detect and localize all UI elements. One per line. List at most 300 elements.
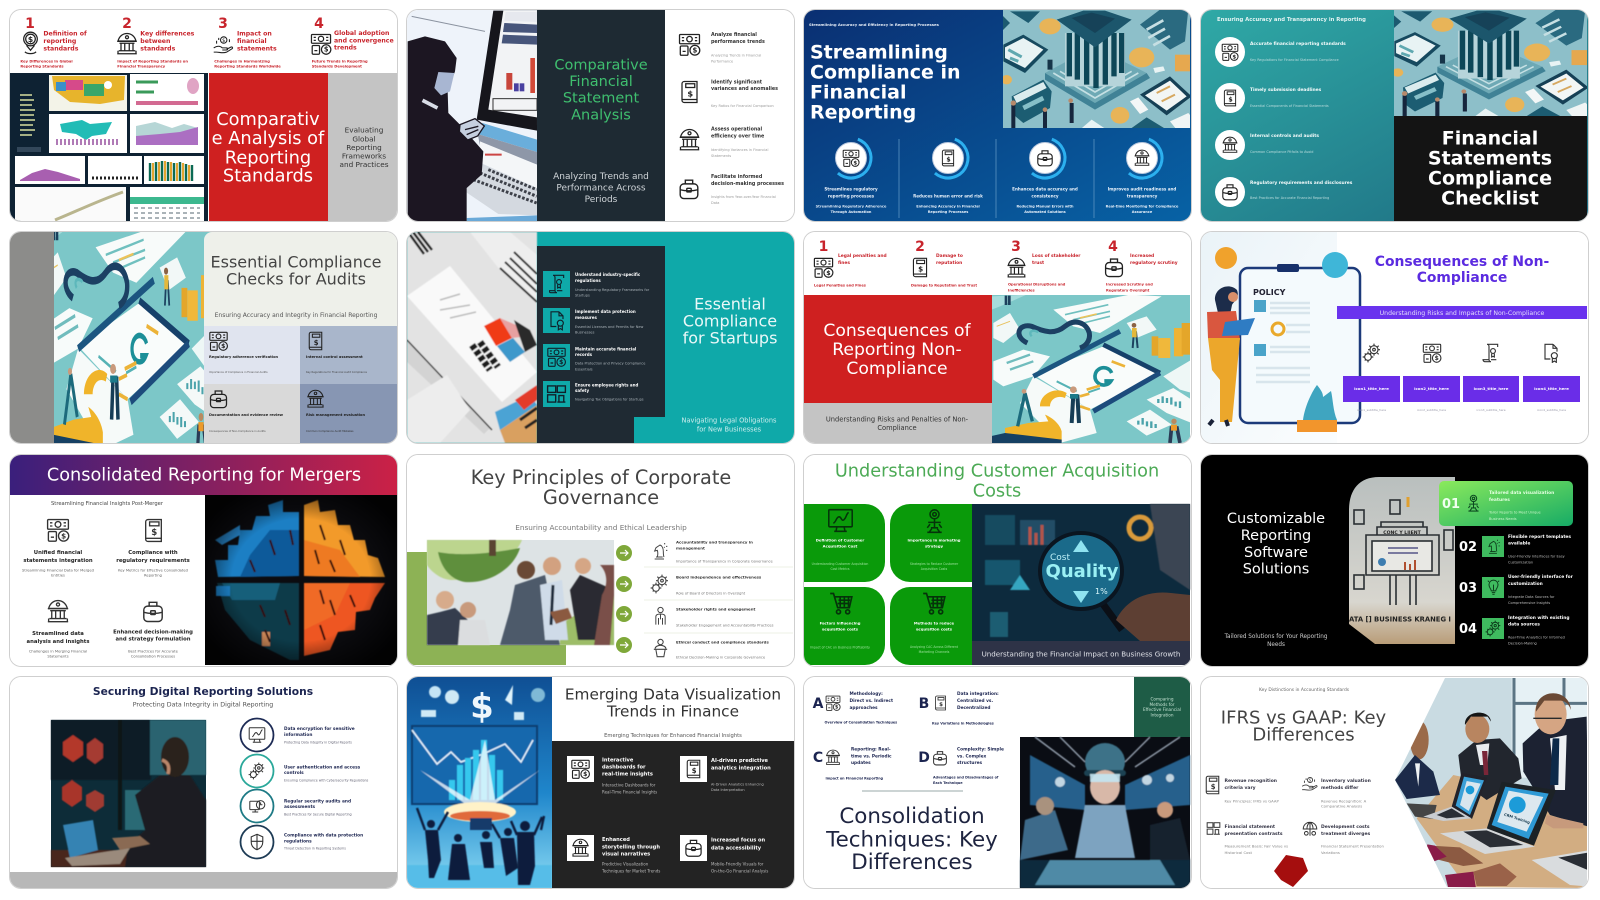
panel: Consolidation Techniques: Key Differences (804, 677, 1191, 888)
illustration: woman with policy clipboard (1201, 232, 1360, 443)
image: finance data burst (407, 677, 552, 888)
numbered item 4: trends (334, 44, 357, 51)
consequence 3: Operational Disruptions and (1008, 282, 1066, 286)
icon list: efficiency over time (711, 134, 765, 140)
difference 4: Variations (1321, 850, 1340, 855)
checklist item 3 (1215, 130, 1319, 160)
panel: Financial Statements Compliance Checklist (1201, 10, 1588, 221)
subtitle (1224, 634, 1328, 648)
benefit: unified statements: Unified financial (34, 550, 82, 556)
title: Reporting (1241, 528, 1311, 544)
card: importance: Strategies to Reduce Customer (910, 562, 959, 566)
icon list: Statements (711, 154, 731, 158)
icon list: Analyze financial (711, 32, 757, 38)
title: Trends in Finance (606, 702, 739, 720)
security item 4: Compliance with data protection (284, 832, 363, 838)
photo: magnifying glass on dashboard: Cost (1050, 553, 1070, 563)
title block (204, 232, 397, 326)
image: isometric documents (40, 224, 216, 453)
list item 3 (543, 344, 645, 372)
title: Governance (543, 486, 659, 509)
feature 01 highlighted: Tailored data visualization (1489, 490, 1554, 496)
benefit 4: Improves audit readiness and (1108, 186, 1176, 192)
checklist item 4: Regulatory requirements and disclosures (1250, 180, 1353, 186)
feature 03 (1459, 574, 1574, 605)
technique A: Overview of Consolidation Techniques (824, 720, 897, 724)
trend 2: AI-Driven Analytics Enhancing (711, 782, 764, 786)
panel: IFRS vs GAAP: Key Differences (1201, 677, 1588, 888)
numbered item 2: Impact of Reporting Standards on (117, 60, 188, 64)
list item 2: Essential Licenses and Permits for New (575, 325, 644, 329)
consequence 1: fines (838, 260, 850, 266)
arrow markers (616, 545, 632, 653)
consequence 4 (1106, 239, 1178, 292)
photo: business handshake (427, 540, 614, 645)
checklist item 3: Common Compliance Pitfalls to Avoid (1250, 150, 1313, 154)
difference 3: Financial statement (1224, 824, 1276, 830)
subtitle (553, 172, 649, 205)
icon list: Facilitate informed (711, 174, 763, 180)
title (683, 294, 777, 348)
photo: woman at monitor (405, 8, 537, 225)
technique B (919, 691, 999, 726)
card: importance: Importance in marketing (907, 538, 961, 542)
benefit 2: Reporting Processes (928, 210, 968, 214)
benefit 1: Through Automation (831, 210, 872, 214)
benefit 3 (1012, 132, 1078, 214)
list item 1: regulations (575, 278, 601, 283)
title: Financial (810, 82, 906, 104)
feature 04: 04 (1459, 622, 1477, 637)
check 2: Key Regulations for Financial Audit Compliance (306, 370, 367, 374)
numbered item 3: 3 (218, 16, 228, 32)
technique D: structures (957, 760, 982, 766)
card: factors: Impact of CAC on Business Profitability (810, 646, 870, 650)
photo: magnifying glass on dashboard: Quality (1046, 561, 1119, 582)
subtitle: for New Businesses (697, 426, 762, 434)
subtitle: Emerging Techniques for Enhanced Financial Insights (604, 733, 742, 739)
grey subtitle block (328, 73, 397, 221)
title: IFRS vs GAAP: Key (1221, 708, 1387, 728)
red title block (209, 73, 328, 221)
benefit: regulatory compliance: Compliance with (128, 550, 178, 556)
red title block: Compliance (846, 359, 948, 379)
difference 2 (1302, 777, 1371, 808)
impact 2: icon2_title_here (1414, 386, 1449, 391)
trend 3: Enhanced (602, 837, 630, 843)
numbered item 4: Standards Development (312, 64, 362, 68)
title: Compliance (1417, 270, 1507, 286)
banner: Understanding Risks and Impacts of Non-Compliance (1380, 310, 1545, 317)
numbered item 1: Key Differences in Global (20, 60, 73, 64)
eyebrow text: Streamlining Accuracy and Efficiency in Reporting Processes (809, 22, 940, 27)
difference 1: Key Principles: IFRS vs GAAP (1224, 798, 1279, 804)
grey subtitle block: Frameworks (342, 152, 386, 160)
list item 3: Maintain accurate financial (575, 346, 637, 352)
card: definition: Cost Metrics (830, 567, 850, 571)
benefit: regulatory compliance: regulatory requirements (116, 558, 190, 564)
feature 01 highlighted: features (1489, 497, 1510, 503)
title: Consequences of Non- (1375, 254, 1549, 270)
icon list: Identify significant (711, 80, 763, 86)
technique C: Impact on Financial Reporting (826, 776, 884, 780)
difference 2: methods differ (1321, 785, 1359, 791)
title: Costs (973, 482, 1021, 502)
card: factors: Factors influencing (820, 620, 861, 626)
title: Compliance in (810, 62, 961, 84)
numbered item 3: Reporting Standards Worldwide (214, 64, 281, 68)
grey subtitle block: Global (352, 134, 376, 144)
difference 4 (1303, 822, 1384, 855)
feature 01 highlighted: Tailor Reports to Meet Unique (1488, 510, 1541, 514)
security item 2: controls (284, 770, 304, 776)
technique A: Direct vs. Indirect (850, 698, 893, 704)
principle 4 (654, 639, 769, 660)
panel: Comparative Financial Statement Analysis (407, 10, 794, 221)
dashboard image (10, 73, 208, 221)
panel: Emerging Data Visualization Trends in Finance (407, 677, 794, 888)
trend 1: real-time insights (602, 772, 653, 778)
benefit: regulatory compliance (116, 520, 190, 578)
photo: magnifying glass on dashboard: 1% (1095, 587, 1108, 596)
title: Comparative (554, 58, 648, 74)
numbered item 3: statements (237, 46, 277, 53)
principle 2: Board independence and effectiveness (676, 574, 762, 580)
security item 4: regulations (284, 838, 312, 844)
list item 2: measures (575, 315, 597, 320)
technique C: time vs. Periodic (851, 754, 892, 760)
title (835, 462, 1159, 502)
technique C: updates (851, 760, 871, 766)
numbered item 1 (20, 16, 87, 68)
technique D: D (918, 750, 930, 766)
trend 2: Data Interpretation (711, 788, 745, 792)
title: Securing Digital Reporting Solutions (93, 685, 313, 698)
numbered item 2: 2 (122, 16, 132, 32)
list item 1: Understand industry-specific (575, 272, 641, 277)
consequence 4: 4 (1108, 239, 1118, 255)
red hexagon accent (1274, 855, 1308, 887)
black title block: Checklist (1441, 188, 1539, 210)
benefit: unified statements: statements integration (23, 558, 93, 564)
security item 3 (240, 790, 352, 822)
principle 3: Stakeholder Engagement and Accountability Practices (676, 624, 774, 628)
difference 1: criteria vary (1224, 785, 1256, 791)
benefit: decision making: Consolidation Processes (131, 654, 175, 658)
technique A: A (813, 696, 824, 712)
numbered item 4: Future Trends in Reporting (312, 60, 368, 64)
technique C (813, 746, 892, 780)
principle 1: Accountability and transparency in (676, 540, 753, 544)
benefit: regulatory compliance: Reporting (144, 574, 162, 578)
benefit 4: Assurance (1132, 210, 1153, 214)
eyebrow text: Ensuring Accuracy and Transparency in Reporting (1217, 17, 1366, 23)
checklist item 1: Key Regulations for Financial Statement Compliance (1250, 58, 1339, 62)
checklist item 1: Accurate financial reporting standards (1250, 41, 1346, 47)
numbered item 4: and convergence (334, 37, 394, 44)
numbered item 1: Reporting Standards (20, 64, 64, 68)
check 4: Common Compliance Audit Mistakes (306, 429, 354, 433)
consequence 4: Increased (1130, 253, 1154, 259)
principle 4: Ethical conduct and compliance standards (676, 640, 769, 644)
feature 03: User-friendly interface for (1508, 574, 1574, 580)
impact 1: icon1_title_here (1354, 386, 1389, 391)
card: methods: Marketing Channels (919, 650, 950, 654)
list item 4: safety (575, 388, 589, 393)
feature 03: customization (1508, 581, 1543, 587)
trend 3: Predictive Visualization (602, 862, 649, 866)
numbered item 3 (214, 16, 281, 68)
benefit 2: Reduces human error and risk (913, 194, 983, 198)
benefit 4 (1106, 132, 1179, 214)
impact 3: icon3_title_here (1474, 386, 1509, 391)
difference 2: Inventory valuation (1321, 778, 1371, 784)
icon list (680, 32, 784, 205)
impact 4: icon4_subtitle_here (1537, 408, 1566, 412)
benefit 2: Enhancing Accuracy in Financial (916, 204, 980, 208)
consequence 2: Damage to (936, 253, 963, 259)
black title block (1394, 116, 1587, 221)
principle 1 (655, 540, 773, 564)
numbered item 2: Financial Transparency (117, 64, 166, 68)
subtitle: Tailored Solutions for Your Reporting (1224, 634, 1328, 640)
check 4 (300, 384, 397, 443)
benefit: streamlined analysis: Challenges in Merging Financial (29, 650, 87, 654)
header banner (10, 455, 397, 495)
title: Compliance (683, 312, 777, 330)
trend 2: AI-driven predictive (711, 758, 769, 764)
impact 2: icon2_subtitle_here (1417, 408, 1446, 412)
difference 3: presentation contrasts (1224, 831, 1283, 837)
title: Reporting (810, 102, 916, 124)
title: Essential (694, 294, 766, 314)
card: importance (890, 504, 972, 582)
grey subtitle block (804, 403, 992, 443)
list item 1: Understanding Regulatory Frameworks for (575, 288, 650, 292)
card: importance: strategy (925, 544, 944, 548)
title: Differences (851, 850, 973, 875)
feature 01 highlighted: 01 (1442, 497, 1460, 512)
list item 4 (543, 381, 644, 407)
consequence 2 (911, 239, 977, 288)
benefit 1: Streamlining Regulatory Adherence (816, 204, 887, 208)
check 3: Documentation and evidence review (209, 413, 284, 417)
list item 1 (543, 271, 650, 298)
principle 1: management (676, 546, 705, 550)
benefit 1: reporting processes (828, 194, 875, 198)
image: futuristic control room (1020, 737, 1190, 888)
title (565, 686, 781, 720)
trend 2: analytics integration (711, 766, 771, 772)
benefit 4: Real-time Monitoring for Compliance (1106, 204, 1179, 208)
red title block: e Analysis of (212, 128, 325, 149)
trend 4: Mobile-Friendly Visuals for (711, 862, 764, 866)
photo: team at laptops (1390, 675, 1590, 892)
technique A: Methodology: (850, 691, 883, 697)
feature 02: 02 (1459, 540, 1477, 555)
benefit: decision making: Best Practices for Accurate (128, 650, 179, 654)
title: Key Principles of Corporate (471, 466, 731, 489)
feature 01 highlighted (1439, 481, 1573, 526)
difference 3: Measurement Basis: Fair Value vs (1224, 844, 1288, 848)
image: four coloured quadrants (205, 495, 397, 665)
feature 02: User-Friendly Interfaces for Easy (1508, 554, 1565, 558)
difference 3 (1207, 823, 1288, 855)
impact 3: icon3_subtitle_here (1476, 408, 1506, 412)
grey subtitle block: Understanding Risks and Penalties of Non- (826, 416, 969, 424)
photo: analyst at laptop (51, 720, 206, 867)
dark centre panel (537, 10, 665, 221)
dark trends panel (552, 741, 794, 888)
subtitle (682, 416, 777, 434)
subtitle: Performance Across (556, 184, 646, 194)
numbered item 3: financial (237, 38, 267, 45)
photo: desk flat lay (407, 232, 537, 443)
feature 04: Integration with existing (1508, 615, 1570, 621)
grey subtitle block: Compliance (877, 424, 917, 432)
technique D: Complexity: Simple (957, 746, 1004, 752)
banner (1337, 306, 1587, 319)
security item 4: Threat Detection in Reporting Systems (283, 846, 346, 850)
feature 02 (1459, 534, 1571, 564)
consequence 3: 3 (1011, 239, 1021, 255)
security item 3: Best Practices for Secure Digital Reporting (284, 812, 352, 816)
benefit: regulatory compliance: Key Metrics for Effective Consolidated (118, 568, 188, 572)
difference 2: Revenue Recognition: A (1321, 798, 1367, 804)
security item 2: User authentication and access (284, 764, 361, 770)
title: Differences (1252, 724, 1355, 746)
check 2 (300, 326, 397, 384)
numbered item 2: between (140, 38, 170, 45)
difference 4: treatment diverges (1321, 831, 1371, 837)
title: Analysis (571, 108, 631, 124)
subtitle: Analyzing Trends and (553, 172, 649, 182)
check 4: Risk management evaluation (306, 413, 365, 417)
security item 2 (240, 754, 369, 788)
icon list: Assess operational (711, 126, 763, 132)
photo: team at laptops: CRM Training (1503, 813, 1531, 825)
trend 4: Increased focus on (711, 838, 766, 844)
title: Streamlining (810, 42, 948, 64)
trend 1: dashboards for (602, 764, 646, 770)
impact 2 (1403, 344, 1460, 412)
subtitle: Ensuring Accountability and Ethical Leadership (515, 523, 687, 532)
list item 3: records (575, 352, 593, 357)
green callout: Effective Financial (1143, 707, 1181, 712)
security item 1: information (284, 732, 312, 738)
image: isometric bank (1392, 10, 1594, 117)
consequence 3: Loss of stakeholder (1032, 253, 1081, 259)
title (1221, 708, 1387, 746)
benefit: streamlined analysis: analysis and insights (27, 639, 89, 645)
image: sketched report board: CONC Y LIIENT (1383, 530, 1422, 536)
icon list: Analyzing Trends in Financial (711, 54, 761, 58)
consequence 2: reputation (936, 260, 962, 266)
trend 2 (680, 756, 771, 792)
black title block: Statements (1428, 148, 1552, 170)
icon list: performance trends (711, 39, 765, 45)
panel: Essential Compliance for Startups (407, 232, 794, 443)
technique D (918, 746, 1004, 785)
check 3: Consequences of Non-Compliance in Audits (209, 429, 266, 433)
title: Solutions (1243, 562, 1309, 578)
subtitle: Needs (1267, 642, 1285, 648)
trend 4: On-the-Go Financial Analysis (711, 868, 768, 874)
numbered item 3: Challenges in Harmonizing (214, 60, 270, 64)
benefit 2 (913, 132, 983, 214)
caption strip (972, 641, 1190, 665)
title (554, 58, 648, 124)
subtitle: Navigating Legal Obligations (682, 416, 777, 424)
difference 4: Financial Statement Presentation (1321, 844, 1384, 848)
dark list panel (537, 246, 665, 443)
icon list: Data (711, 201, 719, 205)
list item 1: Startups (575, 294, 590, 298)
black title block: Financial (1442, 128, 1538, 150)
consequence 1: Legal Penalties and Fines (814, 284, 866, 288)
icon list: decision-making processes (711, 181, 784, 187)
red title block: Standards (223, 166, 313, 186)
black title block: Compliance (1428, 168, 1552, 190)
benefit: streamlined analysis: Streamlined data (32, 631, 84, 637)
check 3 (204, 384, 300, 443)
benefit: decision making: Enhanced decision-making (113, 630, 193, 636)
trend 1 (567, 756, 657, 794)
numbered item 3: Impact on (237, 30, 272, 38)
security item 3: assessments (284, 804, 316, 810)
difference 1 (1206, 776, 1279, 804)
technique C: Reporting: Real- (851, 746, 891, 752)
technique A: approaches (850, 705, 878, 711)
check 1: Regulatory adherence verification (209, 355, 279, 359)
numbered item 4: Global adoption (334, 30, 389, 37)
benefit: streamlined analysis (27, 601, 89, 658)
feature 03: Integrate Data Sources for (1508, 595, 1555, 599)
list item 2 (543, 308, 644, 334)
title (810, 42, 961, 124)
principle 4: Ethical Decision-Making in Corporate Governance (676, 656, 766, 660)
numbered item 2: Key differences (140, 30, 195, 38)
numbered item 2 (117, 16, 195, 68)
eyebrow text: Key Distinctions in Accounting Standards (1259, 687, 1350, 693)
check 2: Internal control assessment (306, 355, 363, 359)
principle 2 (651, 574, 762, 596)
title: Emerging Data Visualization (565, 686, 781, 704)
security item 1: Protecting Data Integrity in Digital Reports (284, 740, 352, 744)
trend 3: storytelling through (602, 844, 660, 850)
panel: Consequences of Non-Compliance (1201, 232, 1588, 443)
principle 2: Role of Board of Directors in Oversight (676, 592, 746, 596)
benefit: decision making (113, 602, 193, 658)
security item 2: Ensuring Compliance with Cybersecurity Regulations (284, 778, 369, 782)
impact 3 (1463, 344, 1519, 412)
trend 1: Interactive Dashboards for (602, 782, 656, 788)
impact 4: icon4_title_here (1534, 386, 1569, 391)
grey footer band (10, 872, 397, 888)
benefit: unified statements: Streamlining Financial Data for Merged (22, 568, 94, 572)
feature 04: Decision-Making (1508, 642, 1537, 646)
consequence 1: Legal penalties and (838, 253, 887, 259)
consequence 1: 1 (819, 239, 828, 255)
numbered item 1: 1 (25, 16, 35, 32)
benefit 3: Automated Solutions (1024, 210, 1066, 214)
trend 1: Real-Time Financial Insights (602, 790, 657, 794)
icon list: variances and anomalies (711, 86, 778, 92)
panel: Consequences of Reporting Non-Compliance (804, 232, 1191, 443)
technique B: B (919, 696, 929, 712)
security item 4 (240, 826, 363, 858)
list item 2: Businesses (575, 330, 595, 334)
